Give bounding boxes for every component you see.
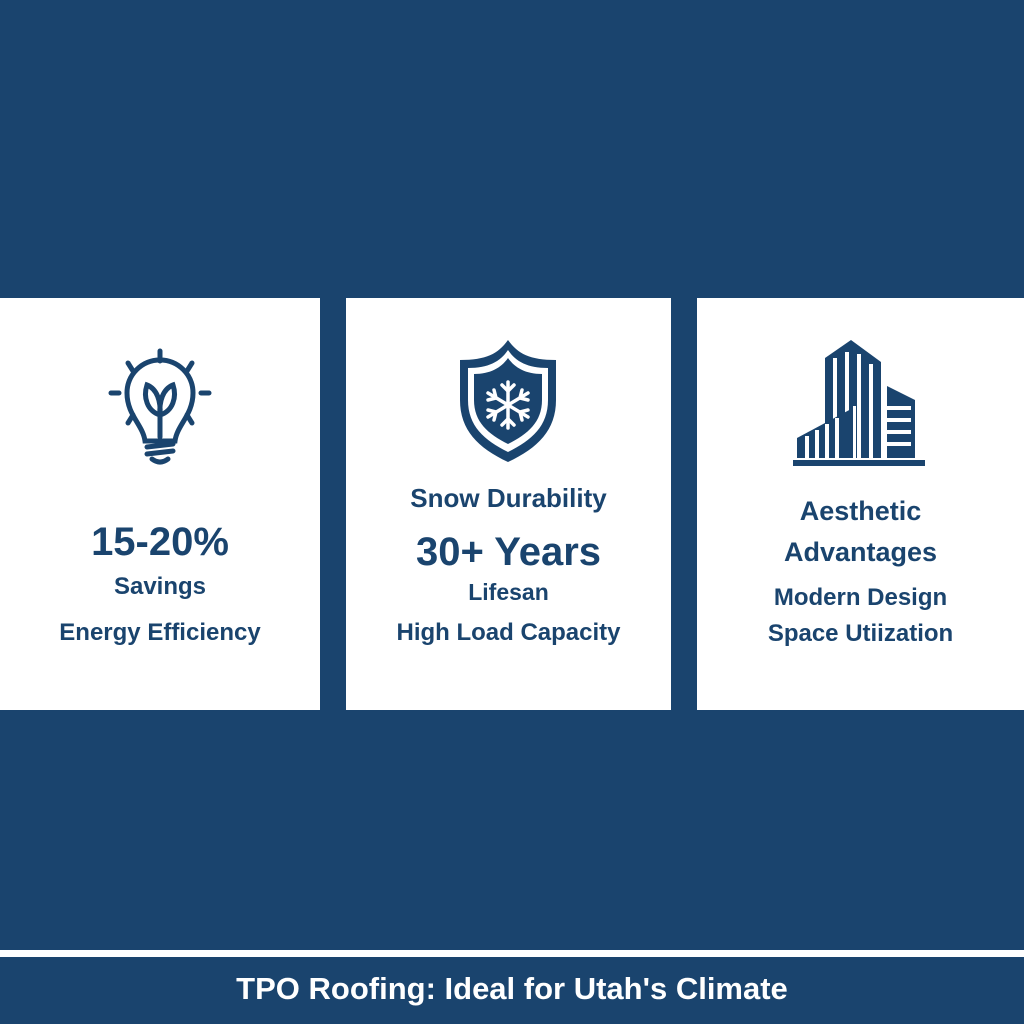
label: energy efficiency: Energy Efficiency [59,619,261,646]
panel: aesthetic advantages [697,298,1024,710]
icon: shield with snowflake [460,340,556,462]
heading: aesthetic advantages: Aesthetic [800,496,921,526]
icon: building [793,340,925,466]
label: modern design: Modern Design [774,584,947,611]
icon: lightbulb with leaf [108,348,212,465]
divider stripe [0,950,1024,957]
label: savings: Savings [114,573,206,600]
stat: 30+ years: 30+ Years [416,530,601,574]
footer title: TPO Roofing: Ideal for Utah's Climate [236,971,788,1006]
label: lifespan: Lifesan [468,579,549,605]
heading: aesthetic advantages: Advantages [784,537,937,567]
label: high load capacity: High Load Capacity [396,619,621,646]
stat: 15-20%: 15-20% [91,520,229,564]
label: space utilization: Space Utiization [768,620,953,647]
panel: snow durability [346,298,671,710]
panel: energy efficiency [0,298,320,710]
heading: snow durability: Snow Durability [410,483,607,513]
heading: aesthetic advantages [784,496,937,567]
